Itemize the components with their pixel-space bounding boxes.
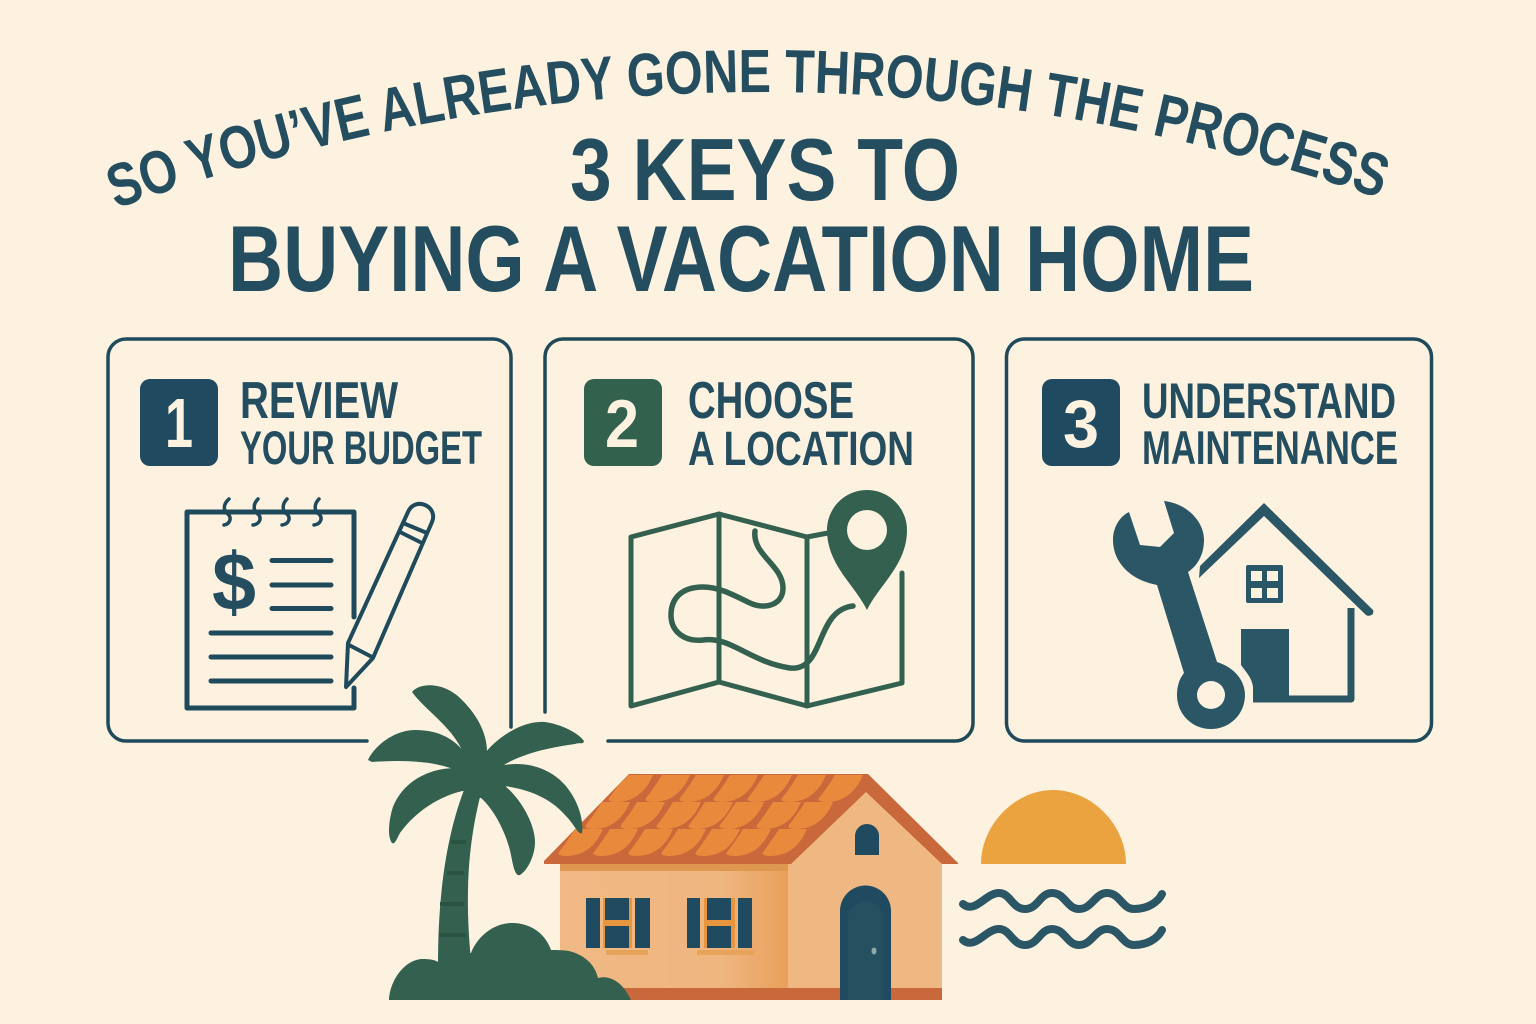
attic window — [855, 824, 879, 855]
badge 1: 1 — [165, 384, 193, 462]
heading: review your budget — [240, 372, 482, 474]
heading: choose a location: CHOOSE — [688, 372, 854, 430]
icon: notepad with dollar sign: $ — [212, 537, 256, 628]
badge 2 — [584, 379, 662, 466]
heading: review your budget: REVIEW — [240, 372, 399, 430]
icon: wrench and house — [1113, 501, 1373, 729]
title — [228, 120, 1254, 311]
bush — [389, 923, 631, 1000]
door — [840, 886, 891, 1000]
heading: understand maintenance: MAINTENANCE — [1142, 421, 1398, 474]
illustration: sun — [981, 790, 1126, 864]
roof — [544, 774, 958, 864]
panel: review your budget — [108, 339, 511, 741]
illustration: vacation house — [544, 774, 958, 1000]
house walls — [560, 790, 942, 1000]
title: BUYING A VACATION HOME — [228, 206, 1254, 311]
panel: understand maintenance — [1006, 339, 1432, 741]
icon: notepad with dollar sign — [187, 499, 433, 708]
illustration: palm tree and bush — [368, 685, 631, 1000]
icon: folded map with pin — [631, 490, 907, 706]
illustration: waves — [963, 893, 1162, 945]
heading: choose a location — [688, 372, 914, 476]
curved subtitle: SO YOU’VE ALREADY GONE THROUGH THE PROCESS — [108, 50, 1388, 206]
heading: understand maintenance — [1142, 373, 1398, 474]
badge 1 — [140, 379, 218, 466]
badge 3: 3 — [1063, 386, 1099, 462]
badge 2: 2 — [605, 386, 639, 462]
palm trunk — [438, 790, 480, 965]
left window — [586, 898, 650, 955]
panel: choose a location — [545, 339, 973, 741]
palm fronds — [368, 685, 584, 875]
badge 3 — [1042, 379, 1120, 466]
heading: understand maintenance: UNDERSTAND — [1142, 373, 1396, 429]
heading: review your budget: YOUR BUDGET — [240, 421, 482, 474]
right window — [687, 898, 755, 955]
title: 3 KEYS TO — [570, 120, 960, 219]
heading: choose a location: A LOCATION — [688, 423, 914, 476]
